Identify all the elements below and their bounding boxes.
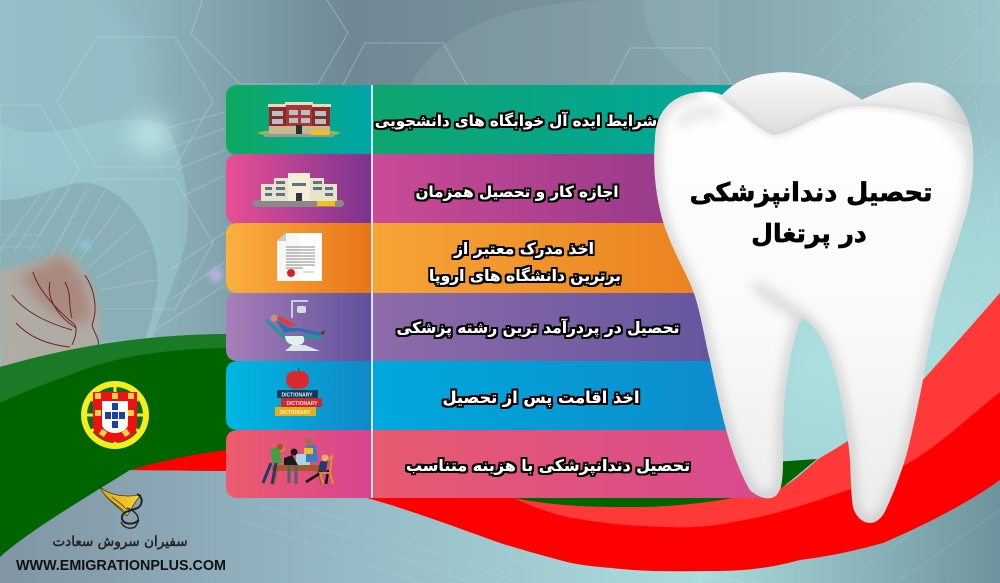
tooth illustration [654, 70, 990, 523]
ghost tooth illustration [0, 112, 225, 375]
title [690, 178, 932, 249]
icon: dental chair [266, 301, 325, 351]
icon: books and apple: DICTIONARY [282, 392, 313, 398]
row 4 text: تحصیل در پردرآمد ترین رشته پزشکی [396, 318, 680, 338]
title: در پرتغال [751, 219, 867, 249]
icon: books and apple [275, 368, 322, 416]
row 3 [226, 223, 770, 293]
vertical divider [371, 85, 373, 498]
row 6 text: تحصیل دندانپزشکی با هزینه متناسب [406, 456, 690, 476]
wave: green [0, 334, 817, 557]
row 2 text: اجازه کار و تحصیل همزمان [415, 183, 619, 201]
icon: certificate document [277, 233, 322, 281]
row 3 text: اخذ مدرک معتبر از [453, 240, 594, 258]
icon: university building [252, 173, 344, 207]
website url: WWW.EMIGRATIONPLUS.COM [16, 557, 226, 574]
row 5 text: اخذ اقامت پس از تحصیل [442, 388, 640, 408]
icon: books and apple: DICTIONARY [280, 410, 311, 416]
row 2 [226, 154, 770, 224]
panel: benefit rows [226, 85, 770, 498]
title: تحصیل دندانپزشکی [690, 178, 932, 208]
row 1 text: شرایط ایده آل خوابگاه های دانشجویی [375, 112, 657, 130]
row 3 text [429, 240, 621, 286]
icon: winged swan [100, 487, 142, 528]
row 3 text: برترین دانشگاه های اروپا [429, 266, 621, 286]
icon: books and apple: DICTIONARY [287, 401, 318, 407]
logo wordmark: سفیران سروش سعادت [52, 534, 188, 550]
row 6 [226, 430, 770, 498]
logo: Emigration Plus [16, 487, 226, 574]
row 4 [226, 293, 770, 361]
icon: students at table [263, 438, 333, 484]
emblem: Portugal coat of arms [81, 381, 149, 449]
icon: dormitory building [258, 102, 340, 137]
wave: red [130, 293, 1000, 571]
row 1 [226, 85, 770, 155]
row 5 [226, 361, 770, 430]
